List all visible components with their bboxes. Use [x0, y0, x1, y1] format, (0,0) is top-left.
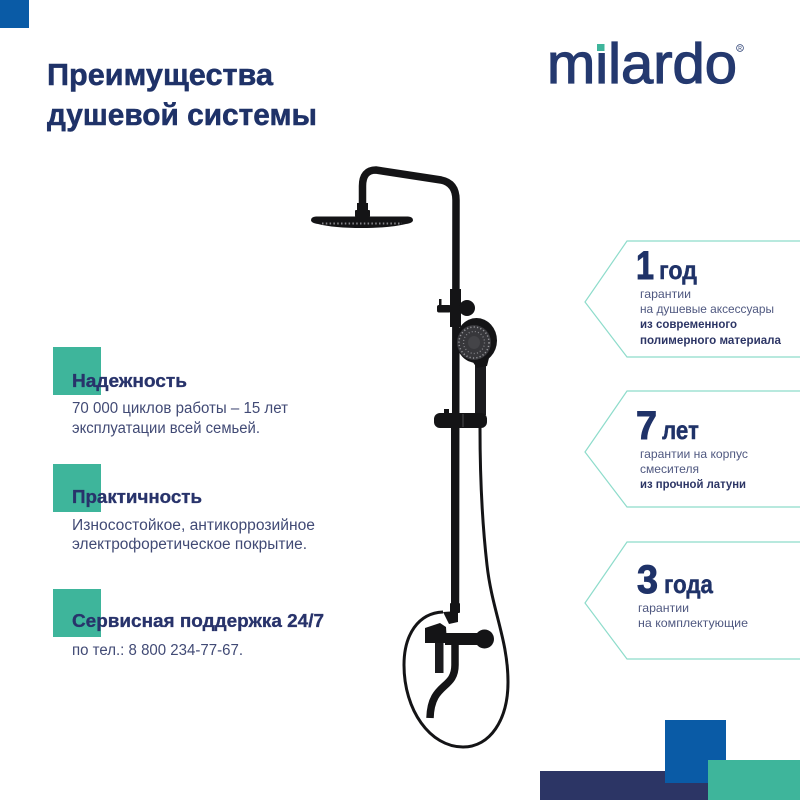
warranty term: года: [664, 569, 713, 599]
feature description: по тел.: 8 800 234-77-67.: [72, 642, 243, 659]
warranty details: из прочной латуни: [640, 477, 746, 491]
spout: [430, 640, 455, 718]
warranty details: [638, 601, 748, 630]
card outline: [585, 542, 800, 659]
warranty details: гарантии: [640, 287, 691, 301]
card outline: [585, 391, 800, 507]
warranty card: 1 year: [585, 241, 800, 357]
warranty term: год: [659, 255, 697, 285]
hose: [404, 428, 508, 747]
feature description: [72, 400, 288, 437]
rail and overhead arm: [362, 170, 456, 605]
sliding holder: [434, 409, 487, 428]
warranty details: из современного: [640, 317, 737, 331]
feature heading: Сервисная поддержка 24/7: [72, 611, 324, 631]
warranty details: гарантии: [638, 601, 689, 615]
title: душевой системы: [47, 97, 317, 132]
warranty details: [640, 447, 748, 491]
warranty term: 3: [637, 558, 658, 602]
warranty card: 7 years: [585, 391, 800, 507]
title: Преимущества: [47, 57, 274, 92]
warranty term: [636, 404, 699, 448]
warranty term: 7: [636, 404, 657, 448]
logo: milardo: R: [738, 46, 742, 52]
feature heading: Практичность: [72, 487, 202, 507]
card outline: [585, 241, 800, 357]
warranty details: гарантии на корпус: [640, 447, 748, 461]
warranty term: [637, 558, 713, 602]
shower system illustration: [311, 170, 508, 747]
warranty card: 3 years: [585, 542, 800, 659]
bottom corner blocks: [540, 720, 800, 800]
title: [47, 57, 317, 132]
feature: service support: [53, 589, 324, 659]
warranty term: [636, 244, 697, 288]
feature marker square: [53, 589, 101, 637]
warranty details: [640, 287, 781, 347]
feature marker square: [53, 464, 101, 512]
mixer: [425, 603, 494, 673]
warranty term: лет: [662, 415, 699, 445]
feature description: Износостойкое, антикоррозийное: [72, 517, 315, 534]
feature: reliability: [53, 347, 288, 437]
hand shower: [456, 318, 497, 415]
feature: practicality: [53, 464, 315, 553]
feature heading: Надежность: [72, 371, 187, 391]
warranty details: полимерного материала: [640, 333, 781, 347]
lower rail below holder: [451, 428, 459, 604]
warranty details: смесителя: [640, 462, 699, 476]
warranty details: на душевые аксессуары: [640, 302, 774, 316]
corner square: [0, 0, 29, 28]
feature description: [72, 517, 315, 553]
feature description: 70 000 циклов работы – 15 лет: [72, 400, 288, 417]
feature description: эксплуатации всей семьей.: [72, 420, 260, 437]
rain shower head: [311, 203, 413, 228]
sleeve and wall holder: [437, 289, 475, 327]
logo: milardo: milardo: [547, 32, 737, 96]
feature marker square: [53, 347, 101, 395]
feature description: электрофоретическое покрытие.: [72, 536, 307, 553]
warranty term: 1: [636, 244, 654, 288]
warranty details: на комплектующие: [638, 616, 748, 630]
